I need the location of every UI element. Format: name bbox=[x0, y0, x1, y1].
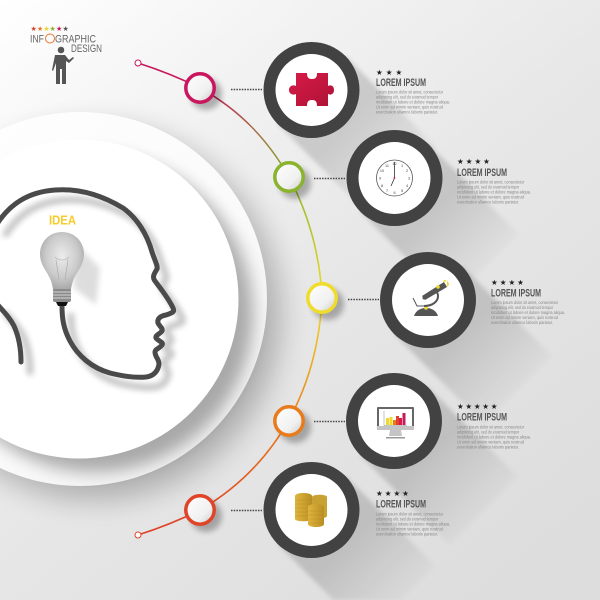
text 4: incididunt ut labore et dolore magna aliqua. bbox=[457, 434, 531, 440]
icon: clock: 10 bbox=[380, 169, 384, 173]
text 5: adipiscing elit, sed do eiusmod tempor bbox=[376, 516, 438, 522]
logo stars: ★ bbox=[44, 25, 50, 33]
icon: clock: 9 bbox=[379, 176, 381, 180]
text 3: incididunt ut labore et dolore magna aliqua. bbox=[491, 310, 565, 315]
node 2 bbox=[275, 163, 311, 199]
dotted connectors bbox=[231, 90, 379, 510]
text 3 bbox=[491, 278, 565, 325]
node 4 bbox=[275, 407, 311, 443]
text 2: Ut enim ad minim veniam, quis nostrud bbox=[457, 194, 524, 200]
text 2: exercitation ullamco laboris pariatur. bbox=[457, 200, 519, 204]
text 3: ★★★★ bbox=[491, 278, 526, 287]
text 3: adipiscing elit, sed do eiusmod tempor bbox=[491, 305, 553, 310]
icon: light bulb bbox=[40, 232, 100, 306]
text 1 bbox=[376, 68, 450, 114]
text 1: adipiscing elit, sed do eiusmod tempor bbox=[376, 94, 438, 100]
text 5: incididunt ut labore et dolore magna aliqua. bbox=[376, 522, 450, 526]
text 4: Ut enim ad minim veniam, quis nostrud bbox=[457, 440, 524, 444]
text 1: incididunt ut labore et dolore magna aliqua. bbox=[376, 100, 450, 104]
icon: coin stacks bbox=[295, 493, 327, 527]
timeline arc bbox=[135, 60, 322, 538]
text 3: exercitation ullamco laboris pariatur. bbox=[491, 320, 553, 325]
icon: clock: 4 bbox=[406, 184, 408, 188]
text 3: Ut enim ad minim veniam, quis nostrud bbox=[491, 315, 558, 320]
text 2: ★★★★ bbox=[457, 157, 492, 166]
text 1: LOREM IPSUM bbox=[376, 77, 426, 89]
text 5: Lorem ipsum dolor sit amet, consectetur bbox=[376, 512, 443, 516]
icon: clock: 3 bbox=[408, 176, 410, 180]
logo: infographic design: GRAPHIC bbox=[55, 34, 96, 46]
icon: clock: 6 bbox=[393, 191, 396, 195]
text 4: Lorem ipsum dolor sit amet, consectetur bbox=[457, 424, 524, 430]
icon: clock: 8 bbox=[381, 184, 383, 188]
node 5 bbox=[186, 496, 222, 532]
text 1: Ut enim ad minim veniam, quis nostrud bbox=[376, 104, 443, 110]
icon: clock: 12 bbox=[392, 162, 397, 166]
icon: clock: 1 bbox=[401, 164, 403, 168]
item 5: coins bbox=[264, 462, 360, 558]
logo: infographic design bbox=[30, 25, 102, 84]
text 1: Lorem ipsum dolor sit amet, consectetur bbox=[376, 90, 443, 94]
text 2: LOREM IPSUM bbox=[457, 167, 507, 179]
panel: head discs bbox=[0, 112, 281, 500]
logo stars: ★ bbox=[56, 25, 62, 33]
text 4: LOREM IPSUM bbox=[457, 412, 507, 424]
text 1: exercitation ullamco laboris pariatur. bbox=[376, 110, 438, 114]
text 5: Ut enim ad minim veniam, quis nostrud bbox=[376, 526, 443, 532]
text 4: ★★★★★ bbox=[457, 402, 499, 411]
icon: puzzle piece bbox=[289, 73, 334, 106]
logo: infographic design: INF bbox=[30, 34, 44, 46]
long shadows of item circles bbox=[278, 56, 552, 600]
icon: clock: 11 bbox=[385, 164, 389, 168]
text 5 bbox=[376, 489, 450, 536]
item 4: monitor bbox=[346, 373, 442, 469]
icon: presenter bbox=[52, 47, 74, 84]
logo stars: ★ bbox=[50, 25, 56, 33]
logo stars: ★ bbox=[62, 25, 69, 33]
item 3: microscope bbox=[380, 252, 476, 348]
text 2 bbox=[457, 157, 531, 204]
text 5: exercitation ullamco laboris pariatur. bbox=[376, 532, 438, 536]
text 5: ★★★★ bbox=[376, 489, 411, 498]
text 3: LOREM IPSUM bbox=[491, 288, 541, 300]
label: idea: IDEA bbox=[49, 212, 77, 228]
logo stars: ★ bbox=[30, 25, 37, 33]
text 2: adipiscing elit, sed do eiusmod tempor bbox=[457, 184, 519, 190]
text 4: exercitation ullamco laboris pariatur. bbox=[457, 444, 519, 450]
text 3: Lorem ipsum dolor sit amet, consectetur bbox=[491, 300, 558, 305]
head outline with light bulb bbox=[0, 190, 183, 387]
icon: monitor with bar chart bbox=[377, 407, 414, 438]
item 2: clock bbox=[346, 130, 442, 226]
text 2: incididunt ut labore et dolore magna aliqua. bbox=[457, 190, 531, 194]
icon: microscope bbox=[413, 280, 449, 316]
text 2: Lorem ipsum dolor sit amet, consectetur bbox=[457, 180, 524, 184]
icon: clock: 2 bbox=[406, 169, 408, 173]
icon: clock bbox=[376, 160, 412, 196]
text 5: LOREM IPSUM bbox=[376, 498, 426, 510]
icon: clock: 5 bbox=[401, 189, 403, 193]
text 1: ★★★ bbox=[376, 68, 405, 77]
logo: infographic design: DESIGN bbox=[71, 43, 102, 55]
text 4: adipiscing elit, sed do eiusmod tempor bbox=[457, 430, 519, 434]
logo stars: ★ bbox=[37, 25, 43, 33]
icon: clock: 7 bbox=[386, 189, 388, 193]
node 3 bbox=[308, 284, 344, 320]
logo stars bbox=[30, 25, 69, 33]
node 1 bbox=[186, 74, 222, 110]
item 1: puzzle bbox=[264, 42, 360, 138]
text 4 bbox=[457, 402, 531, 450]
